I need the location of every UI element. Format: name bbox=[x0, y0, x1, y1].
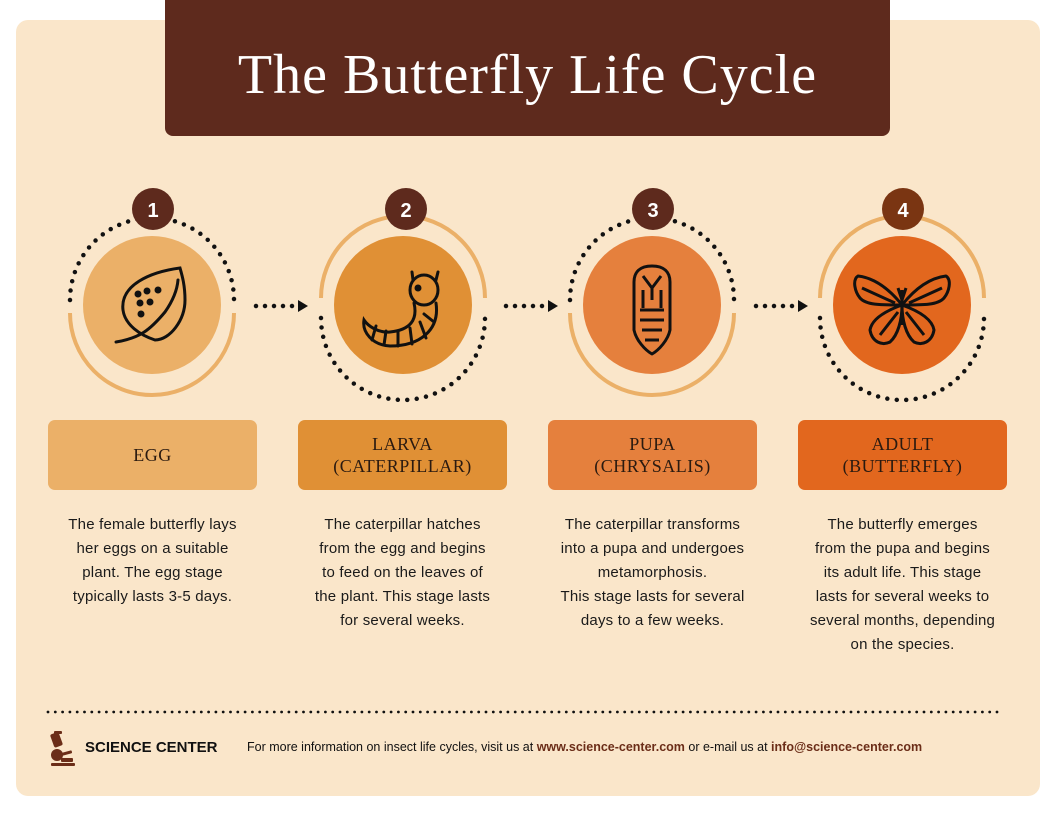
icon: leaf with eggs bbox=[116, 268, 185, 342]
label: larva: LARVA bbox=[372, 434, 433, 454]
icon: chrysalis bbox=[634, 266, 670, 354]
label: adult bbox=[798, 420, 1007, 490]
label: larva: (CATERPILLAR) bbox=[333, 456, 472, 476]
text: adult description: on the species. bbox=[851, 636, 954, 653]
text: larva description: to feed on the leaves of bbox=[322, 564, 483, 581]
badge 3 bbox=[632, 188, 674, 230]
arrow 2 bbox=[506, 300, 558, 312]
arrow 1 bbox=[256, 300, 308, 312]
text: egg description bbox=[68, 516, 237, 605]
text: egg description: her eggs on a suitable bbox=[76, 540, 228, 557]
label: larva bbox=[298, 420, 507, 490]
stage 2 circle: 2 bbox=[400, 200, 412, 222]
stage 1 circle: 1 bbox=[147, 200, 159, 222]
label: pupa bbox=[548, 420, 757, 490]
footer info: For more information on insect life cycles, visit us at www.science-center.com or e-mail us at info@science-center.com bbox=[247, 740, 922, 754]
badge 2 bbox=[385, 188, 427, 230]
text: pupa description bbox=[560, 516, 744, 629]
text: larva description bbox=[315, 516, 490, 629]
label: egg: EGG bbox=[133, 445, 172, 465]
text: pupa description: days to a few weeks. bbox=[581, 612, 724, 629]
icon: caterpillar bbox=[364, 272, 438, 346]
text: adult description: The butterfly emerges bbox=[827, 516, 978, 533]
text: adult description: several months, depending bbox=[810, 612, 995, 629]
stage 4 circle bbox=[820, 188, 984, 400]
title bbox=[165, 0, 890, 136]
text: adult description: its adult life. This stage bbox=[824, 564, 981, 581]
label: egg bbox=[48, 420, 257, 490]
label: pupa: PUPA bbox=[629, 434, 676, 454]
text: pupa description: The caterpillar transforms bbox=[565, 516, 740, 533]
text: pupa description: metamorphosis. bbox=[598, 564, 707, 581]
text: adult description: lasts for several weeks to bbox=[816, 588, 989, 605]
title: The Butterfly Life Cycle bbox=[238, 44, 817, 106]
text: adult description bbox=[810, 516, 995, 653]
text: pupa description: into a pupa and undergoes bbox=[561, 540, 744, 557]
text: egg description: typically lasts 3-5 days. bbox=[73, 588, 232, 605]
text: larva description: for several weeks. bbox=[340, 612, 465, 629]
text: pupa description: This stage lasts for several bbox=[560, 588, 744, 605]
label: pupa: (CHRYSALIS) bbox=[594, 456, 711, 476]
footer brand: SCIENCE CENTER bbox=[85, 739, 218, 756]
text: larva description: The caterpillar hatches bbox=[324, 516, 481, 533]
text: egg description: The female butterfly lays bbox=[68, 516, 237, 533]
arrow 3 bbox=[756, 300, 808, 312]
badge 4 bbox=[882, 188, 924, 230]
text: egg description: plant. The egg stage bbox=[82, 564, 223, 581]
label: adult: (BUTTERFLY) bbox=[843, 456, 962, 476]
stage 4 circle: 4 bbox=[897, 200, 909, 222]
icon: microscope bbox=[50, 731, 75, 766]
text: larva description: from the egg and begins bbox=[319, 540, 486, 557]
stage 2 circle bbox=[321, 188, 485, 400]
badge 1 bbox=[132, 188, 174, 230]
text: adult description: from the pupa and begins bbox=[815, 540, 990, 557]
text: larva description: the plant. This stage lasts bbox=[315, 588, 490, 605]
icon: butterfly bbox=[855, 276, 949, 344]
label: adult: ADULT bbox=[872, 434, 933, 454]
stage 1 circle bbox=[70, 188, 234, 395]
stage 3 circle: 3 bbox=[647, 200, 659, 222]
stage 3 circle bbox=[570, 188, 734, 395]
